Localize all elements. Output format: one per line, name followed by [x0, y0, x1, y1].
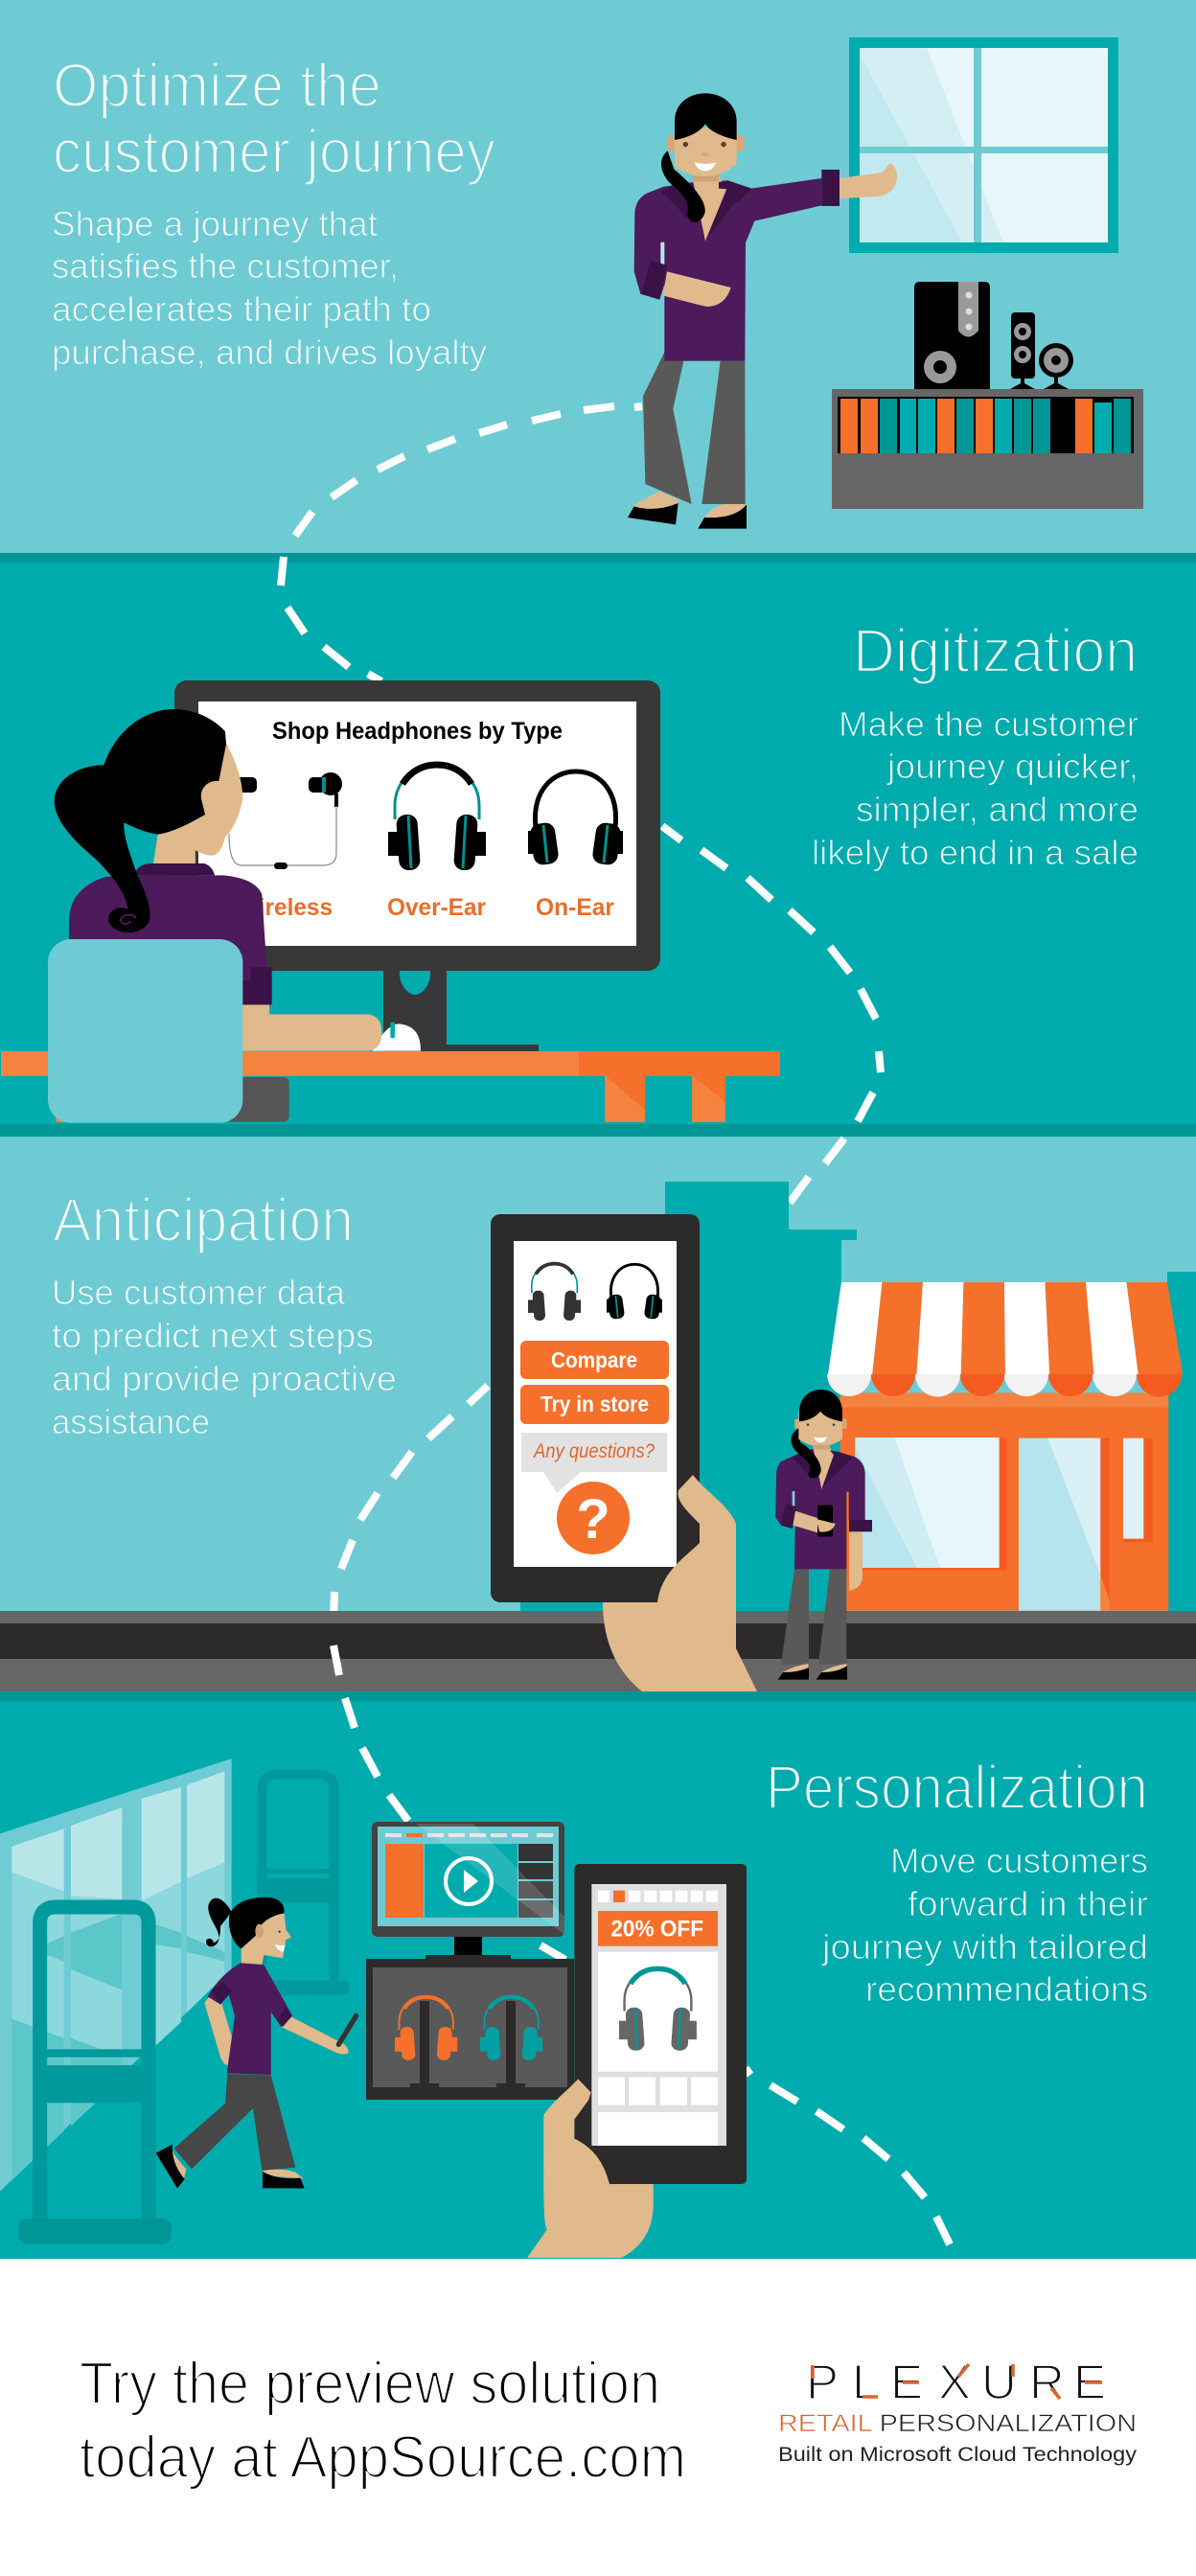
icon: smartphone with personalized offer [574, 1864, 747, 2184]
text block: move customers forward: forward in their [908, 1884, 1148, 1923]
offer banner: 20% off [598, 1911, 718, 1946]
logo: plexure retail personalization: Built on Microsoft Cloud Technology [778, 2444, 1138, 2466]
icon: phone headphones [528, 1264, 662, 1321]
icon: computer monitor [174, 680, 660, 1051]
text block: shape a journey: Shape a journey that [52, 204, 378, 243]
heading: personalization: Personalization [766, 1753, 1148, 1822]
icon: hand holding phone [527, 2079, 654, 2258]
text block: shape a journey: purchase, and drives loyalty [52, 333, 487, 372]
text block: move customers forward: journey with tailored [821, 1927, 1148, 1966]
icon: storefront [827, 1282, 1183, 1611]
icon: media shelf with books [832, 389, 1143, 509]
dashed journey path: final segment [345, 1698, 950, 2244]
icon: question mark circle: ? [576, 1488, 610, 1551]
heading: anticipation: Anticipation [53, 1185, 354, 1254]
text block: use customer data: and provide proactive [52, 1359, 397, 1398]
offer banner: 20% off: 20% OFF [610, 1917, 703, 1943]
text block: shape a journey: accelerates their path to [52, 289, 431, 329]
dashed journey path: middle segment [281, 557, 881, 1121]
button: try in store: Try in store [540, 1392, 649, 1416]
text block: make the customer journey quicker: journey quicker, [886, 747, 1138, 786]
icon: over-ear headphones [388, 765, 486, 871]
icon: teal buildings [520, 1182, 1196, 1611]
icon: window [849, 37, 1118, 253]
text block: use customer data [52, 1273, 397, 1441]
icon: sidewalk and road [0, 1611, 1196, 1701]
label: on-ear: On-Ear [536, 894, 614, 921]
callout: any questions: Any questions? [532, 1440, 655, 1462]
text block: shape a journey: satisfies the customer, [52, 246, 399, 286]
text block: make the customer journey quicker: Make the customer [839, 704, 1138, 744]
button: try in store [520, 1385, 669, 1424]
label: wireless: Wireless [237, 894, 333, 921]
button: compare: Compare [551, 1347, 637, 1372]
icon: play button [446, 1858, 492, 1904]
text block: move customers forward: Move customers [890, 1841, 1148, 1880]
screen heading: shop headphones by type: Shop Headphones by Type [272, 718, 563, 745]
icon: hand holding phone [603, 1475, 757, 1691]
dashed journey path: top segment [295, 406, 642, 536]
panel: personalization [0, 1698, 1196, 2259]
icon: smartphone with offers [491, 1214, 700, 1602]
text block: shape a journey [52, 204, 487, 372]
figure: woman with phone outside store [775, 1390, 872, 1680]
text block: use customer data: to predict next steps [52, 1316, 374, 1355]
button: compare [520, 1341, 669, 1379]
text block: try the preview solution: Try the preview solution [80, 2351, 660, 2417]
text block: use customer data: Use customer data [52, 1273, 346, 1312]
text block: try the preview solution: today at AppSource.com [80, 2425, 686, 2491]
text block: make the customer journey quicker: likely to end in a sale [812, 833, 1138, 872]
panel: anticipation [0, 1124, 1196, 1701]
icon: striped awning [827, 1282, 1183, 1397]
heading: digitization: Digitization [853, 616, 1138, 685]
figure: woman pointing at window [628, 93, 897, 529]
text block: move customers forward [821, 1841, 1148, 2009]
icon: question mark circle [557, 1482, 630, 1554]
figure: woman at computer [48, 709, 421, 1123]
icon: earbuds [229, 772, 342, 869]
icon: display screen with video [372, 1822, 564, 1961]
text block: use customer data: assistance [52, 1402, 210, 1441]
icon: recommended headphones [619, 1968, 697, 2051]
panel: optimize the customer journey [0, 0, 1196, 553]
dashed journey path: road segment [334, 1645, 339, 1675]
figure: woman walking with phone [156, 1898, 356, 2188]
heading: optimize the customer journey: Optimize the [53, 51, 381, 120]
icon: desk [1, 1051, 780, 1122]
panel: footer call to action [0, 2259, 1196, 2576]
icon: on-ear headphones [528, 771, 623, 866]
heading: optimize the customer journey [53, 51, 495, 186]
icon: headphone display case [366, 1959, 574, 2100]
text block: move customers forward: recommendations [865, 1969, 1148, 2009]
text block: make the customer journey quicker [812, 704, 1138, 872]
text block: try the preview solution [80, 2351, 686, 2491]
callout: any questions [521, 1433, 667, 1493]
label: over-ear: Over-Ear [387, 894, 486, 921]
logo: plexure retail personalization [778, 2355, 1138, 2466]
logo: plexure retail personalization: PLEXURE [806, 2355, 1106, 2409]
logo: plexure retail personalization: RETAIL PERSONALIZATION [778, 2410, 1137, 2437]
dashed journey path: store segment [334, 1138, 844, 1622]
icon: speakers [914, 282, 1073, 389]
text block: make the customer journey quicker: simpler, and more [856, 790, 1138, 829]
heading: optimize the customer journey: customer journey [53, 117, 495, 186]
panel: digitization [0, 553, 1196, 1124]
icon: store window and security gates [0, 1759, 349, 2244]
